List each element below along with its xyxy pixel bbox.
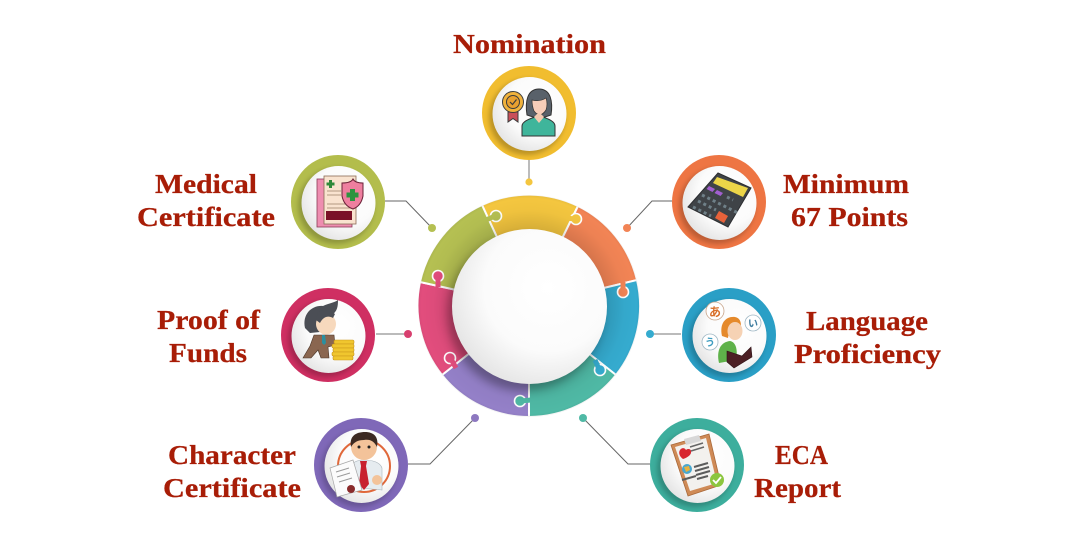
ring segment: olive bbox=[420, 205, 529, 306]
ring segment: purple bbox=[442, 306, 529, 417]
badge: minimum points bbox=[672, 155, 766, 249]
inner circle shadow bbox=[447, 235, 603, 391]
label: Proof of Funds bbox=[157, 305, 261, 368]
ring segment: pink bbox=[417, 282, 529, 375]
icon: award and woman bbox=[502, 89, 555, 136]
central puzzle ring bbox=[417, 195, 640, 417]
label: Medical Certificate: Certificate bbox=[137, 202, 275, 232]
connector: minimum points bbox=[623, 201, 672, 232]
badge: medical certificate bbox=[291, 155, 385, 249]
ring shading bbox=[418, 195, 640, 417]
badge: eca report bbox=[650, 418, 744, 512]
label: Medical Certificate: Medical bbox=[155, 169, 258, 199]
ring segment: yellow bbox=[482, 195, 578, 306]
ring segment: teal bbox=[529, 306, 616, 417]
label: Language Proficiency bbox=[794, 306, 942, 369]
connector: medical certificate bbox=[385, 201, 436, 232]
icon: man with coins bbox=[303, 300, 354, 360]
heading: Nomination: Nomination bbox=[453, 29, 606, 59]
label: Medical Certificate bbox=[137, 169, 275, 232]
label: Minimum 67 Points: 67 Points bbox=[791, 202, 908, 232]
label: Minimum 67 Points: Minimum bbox=[783, 169, 910, 199]
connector: proof of funds bbox=[376, 330, 412, 338]
badge: character certificate bbox=[314, 418, 408, 512]
icon: reading child with speech bubbles bbox=[702, 302, 761, 368]
connector: language proficiency bbox=[646, 330, 681, 338]
icon: certificate and shield bbox=[317, 176, 363, 227]
badge: language proficiency bbox=[682, 288, 776, 382]
connector: eca report bbox=[579, 414, 650, 464]
icon: calculator bbox=[688, 173, 751, 227]
icon: clipboard report bbox=[671, 434, 724, 496]
connector: nomination bbox=[525, 158, 533, 186]
label: Language Proficiency: Proficiency bbox=[794, 339, 942, 369]
ring segment: orange bbox=[529, 206, 637, 306]
label: Character Certificate: Character bbox=[168, 440, 296, 470]
icon: reading child with speech bubbles: う bbox=[705, 334, 715, 349]
inner white circle bbox=[452, 229, 607, 384]
label: Language Proficiency: Language bbox=[806, 306, 928, 336]
puzzle knobs bbox=[432, 210, 628, 406]
label: Proof of Funds: Funds bbox=[169, 338, 247, 368]
label: ECA Report: Report bbox=[754, 473, 841, 503]
icon: man holding certificate bbox=[330, 432, 390, 497]
label: Character Certificate bbox=[163, 440, 301, 503]
label: ECA Report bbox=[754, 440, 841, 503]
icon: reading child with speech bubbles: あ bbox=[709, 303, 721, 320]
badge: proof of funds bbox=[281, 288, 375, 382]
badge: nomination bbox=[482, 66, 576, 160]
label: Minimum 67 Points bbox=[783, 169, 910, 232]
connector: character certificate bbox=[408, 414, 479, 464]
label: Character Certificate: Certificate bbox=[163, 473, 301, 503]
icon: reading child with speech bubbles: い bbox=[748, 315, 758, 330]
label: ECA Report: ECA bbox=[775, 440, 828, 470]
ring segment: blue bbox=[529, 280, 640, 375]
label: Proof of Funds: Proof of bbox=[157, 305, 261, 335]
